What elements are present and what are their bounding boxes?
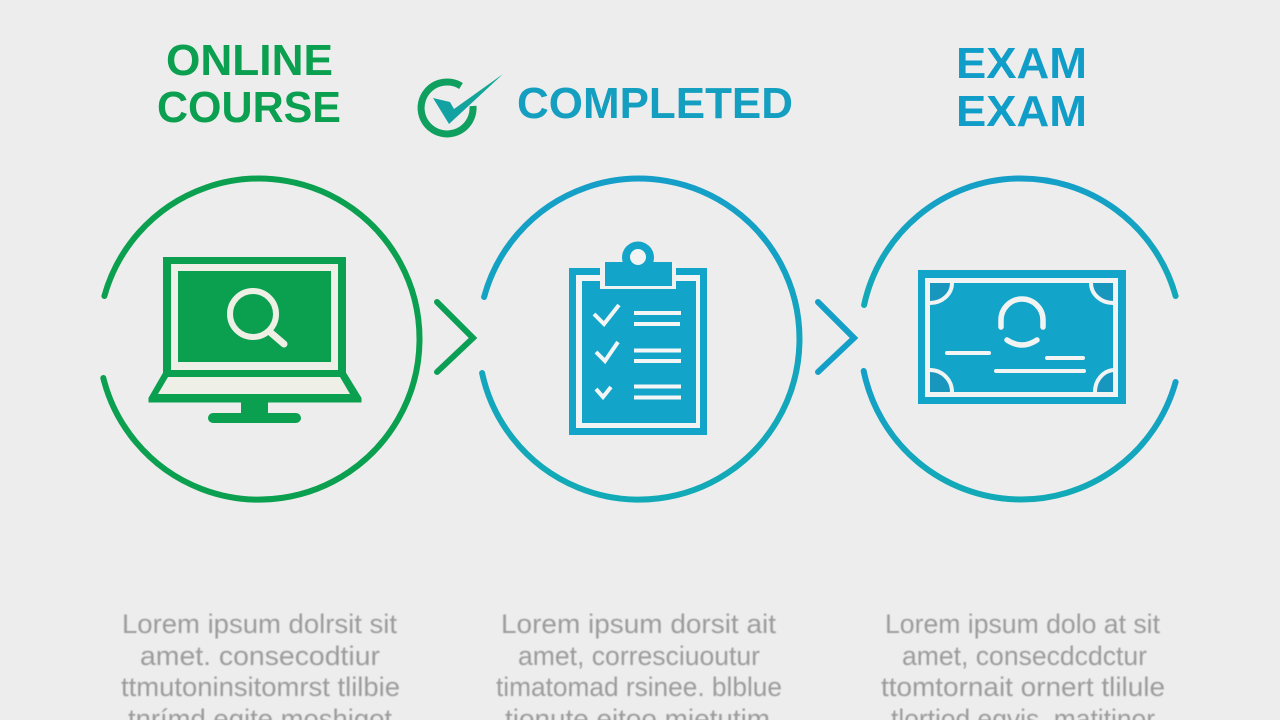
certificate seal and lines xyxy=(947,299,1084,371)
text block: exam: Lorem ipsum dolo at sit xyxy=(885,609,1161,639)
ring: completed xyxy=(482,179,799,500)
text block: online course: Lorem ipsum dolrsit sit xyxy=(122,609,398,639)
icon: completed check mark xyxy=(421,74,503,134)
icon: certificate xyxy=(918,270,1126,404)
text block: completed xyxy=(496,609,782,720)
title: online course xyxy=(157,36,341,132)
title: online course: ONLINE xyxy=(166,36,333,85)
title: completed: COMPLETED xyxy=(517,79,793,128)
icon: laptop with magnifier xyxy=(149,257,361,423)
text block: online course xyxy=(121,609,400,720)
text block: online course: ttmutoninsitomrst tlilbie xyxy=(121,672,400,702)
ring: exam xyxy=(864,178,1176,499)
icon: clipboard checklist xyxy=(569,242,707,435)
arrow: second to third xyxy=(818,302,854,372)
text block: online course: amet. consecodtiur xyxy=(140,641,380,671)
text block: exam: ttomtornait ornert tlilule xyxy=(881,672,1165,702)
text block: exam xyxy=(881,609,1165,720)
text block: completed: Lorem ipsum dorsit ait xyxy=(501,609,777,639)
ring: online course xyxy=(103,179,420,500)
title: exam xyxy=(956,39,1087,136)
arrow: first to second xyxy=(437,302,473,372)
checklist items xyxy=(594,305,681,398)
text block: completed: timatomad rsinee. blblue xyxy=(496,672,782,702)
certificate corners xyxy=(930,283,1113,392)
title: exam: EXAM xyxy=(956,87,1087,136)
title: online course: COURSE xyxy=(157,83,341,132)
text block: completed: amet, corresciuoutur xyxy=(518,641,760,671)
text block: exam: amet, consecdcdctur xyxy=(902,641,1147,671)
title: exam: EXAM xyxy=(956,39,1087,88)
icon: magnifier xyxy=(230,291,284,344)
